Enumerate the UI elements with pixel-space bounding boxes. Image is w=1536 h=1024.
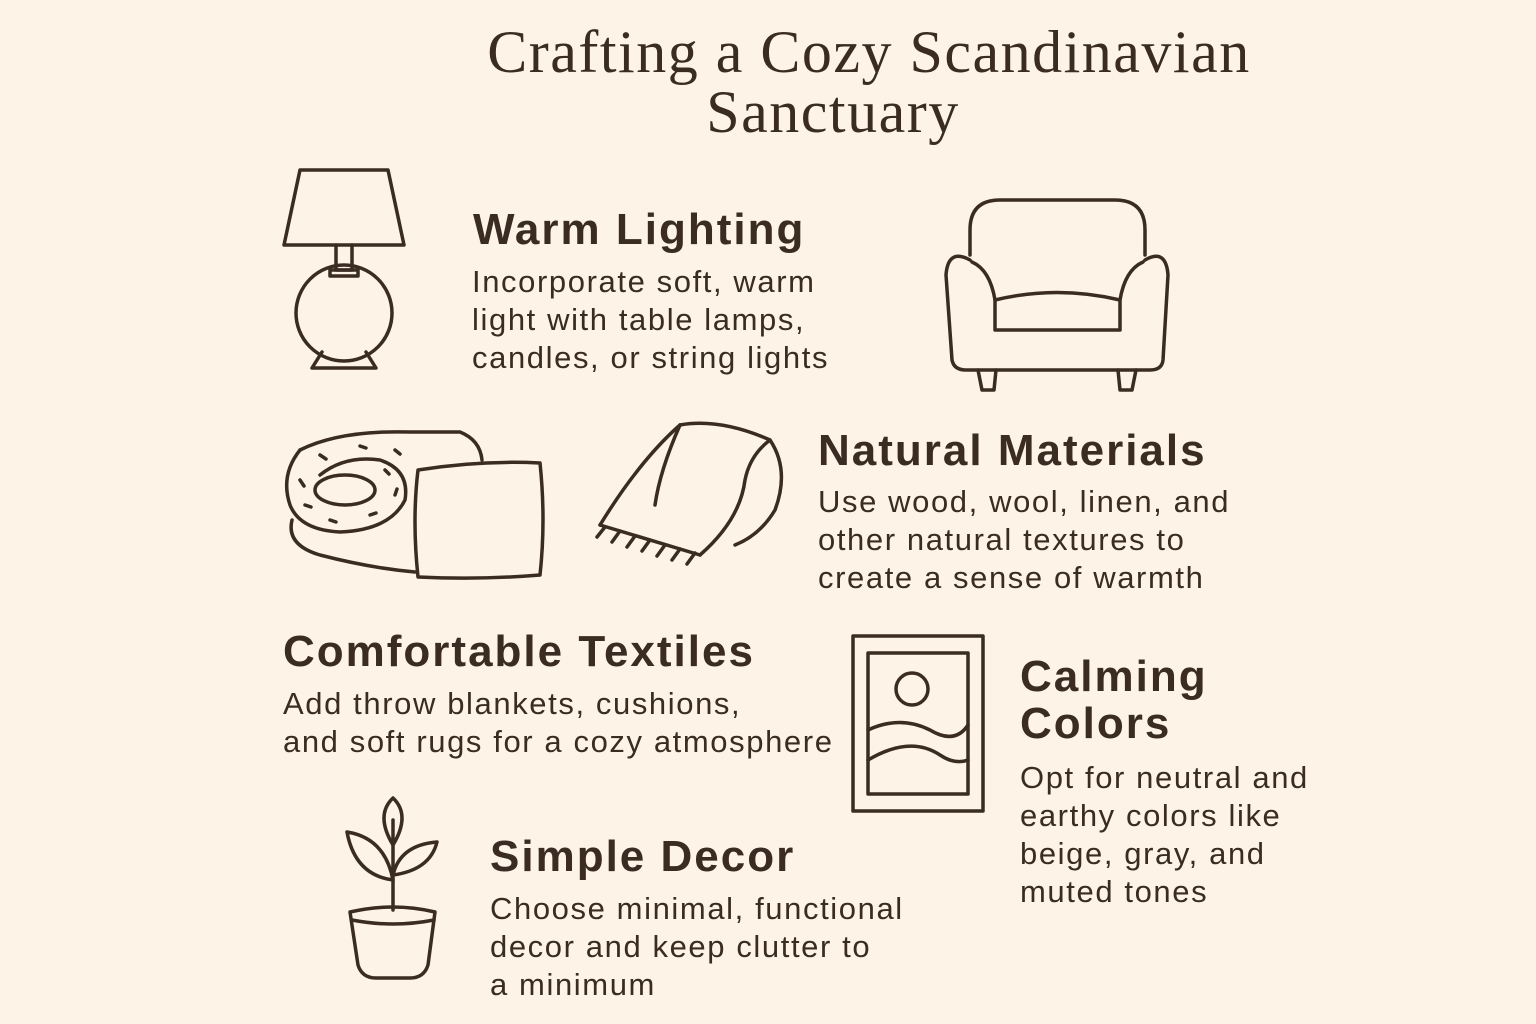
section: warm lighting [472, 205, 829, 375]
text: comfortable textiles: and soft rugs for a cozy atmosphere [283, 724, 834, 759]
title: Sanctuary [706, 79, 960, 145]
section: comfortable textiles [283, 627, 834, 759]
title: Crafting a Cozy Scandinavian [487, 19, 1251, 85]
text: warm lighting: candles, or string lights [472, 340, 829, 375]
heading: calming colors: Colors [1020, 699, 1171, 748]
heading: simple decor: Simple Decor [490, 832, 795, 881]
text: simple decor: Choose minimal, functional [490, 891, 904, 926]
text: natural materials: other natural textures to [818, 522, 1185, 557]
heading: comfortable textiles: Comfortable Textiles [283, 627, 755, 676]
title [487, 19, 1251, 145]
text: comfortable textiles [283, 686, 834, 759]
section: natural materials [818, 426, 1230, 595]
text: comfortable textiles: Add throw blankets, cushions, [283, 686, 741, 721]
text: calming colors: Opt for neutral and [1020, 760, 1309, 795]
text: natural materials: Use wood, wool, linen, and [818, 484, 1230, 519]
heading: warm lighting: Warm Lighting [473, 205, 805, 254]
section: calming colors [1020, 652, 1309, 909]
text: calming colors [1020, 760, 1309, 909]
text: simple decor: decor and keep clutter to [490, 929, 871, 964]
text: warm lighting: Incorporate soft, warm [472, 264, 816, 299]
text: calming colors: earthy colors like [1020, 798, 1281, 833]
text: warm lighting [472, 264, 829, 375]
text: natural materials [818, 484, 1230, 595]
text: calming colors: beige, gray, and [1020, 836, 1266, 871]
text: calming colors: muted tones [1020, 874, 1208, 909]
text: warm lighting: light with table lamps, [472, 302, 805, 337]
heading: calming colors: Calming [1020, 652, 1208, 701]
text: simple decor [490, 891, 904, 1002]
text: simple decor: a minimum [490, 967, 656, 1002]
text: natural materials: create a sense of warmth [818, 560, 1204, 595]
heading: calming colors [1020, 652, 1208, 748]
heading: natural materials: Natural Materials [818, 426, 1207, 475]
section: simple decor [490, 832, 904, 1002]
